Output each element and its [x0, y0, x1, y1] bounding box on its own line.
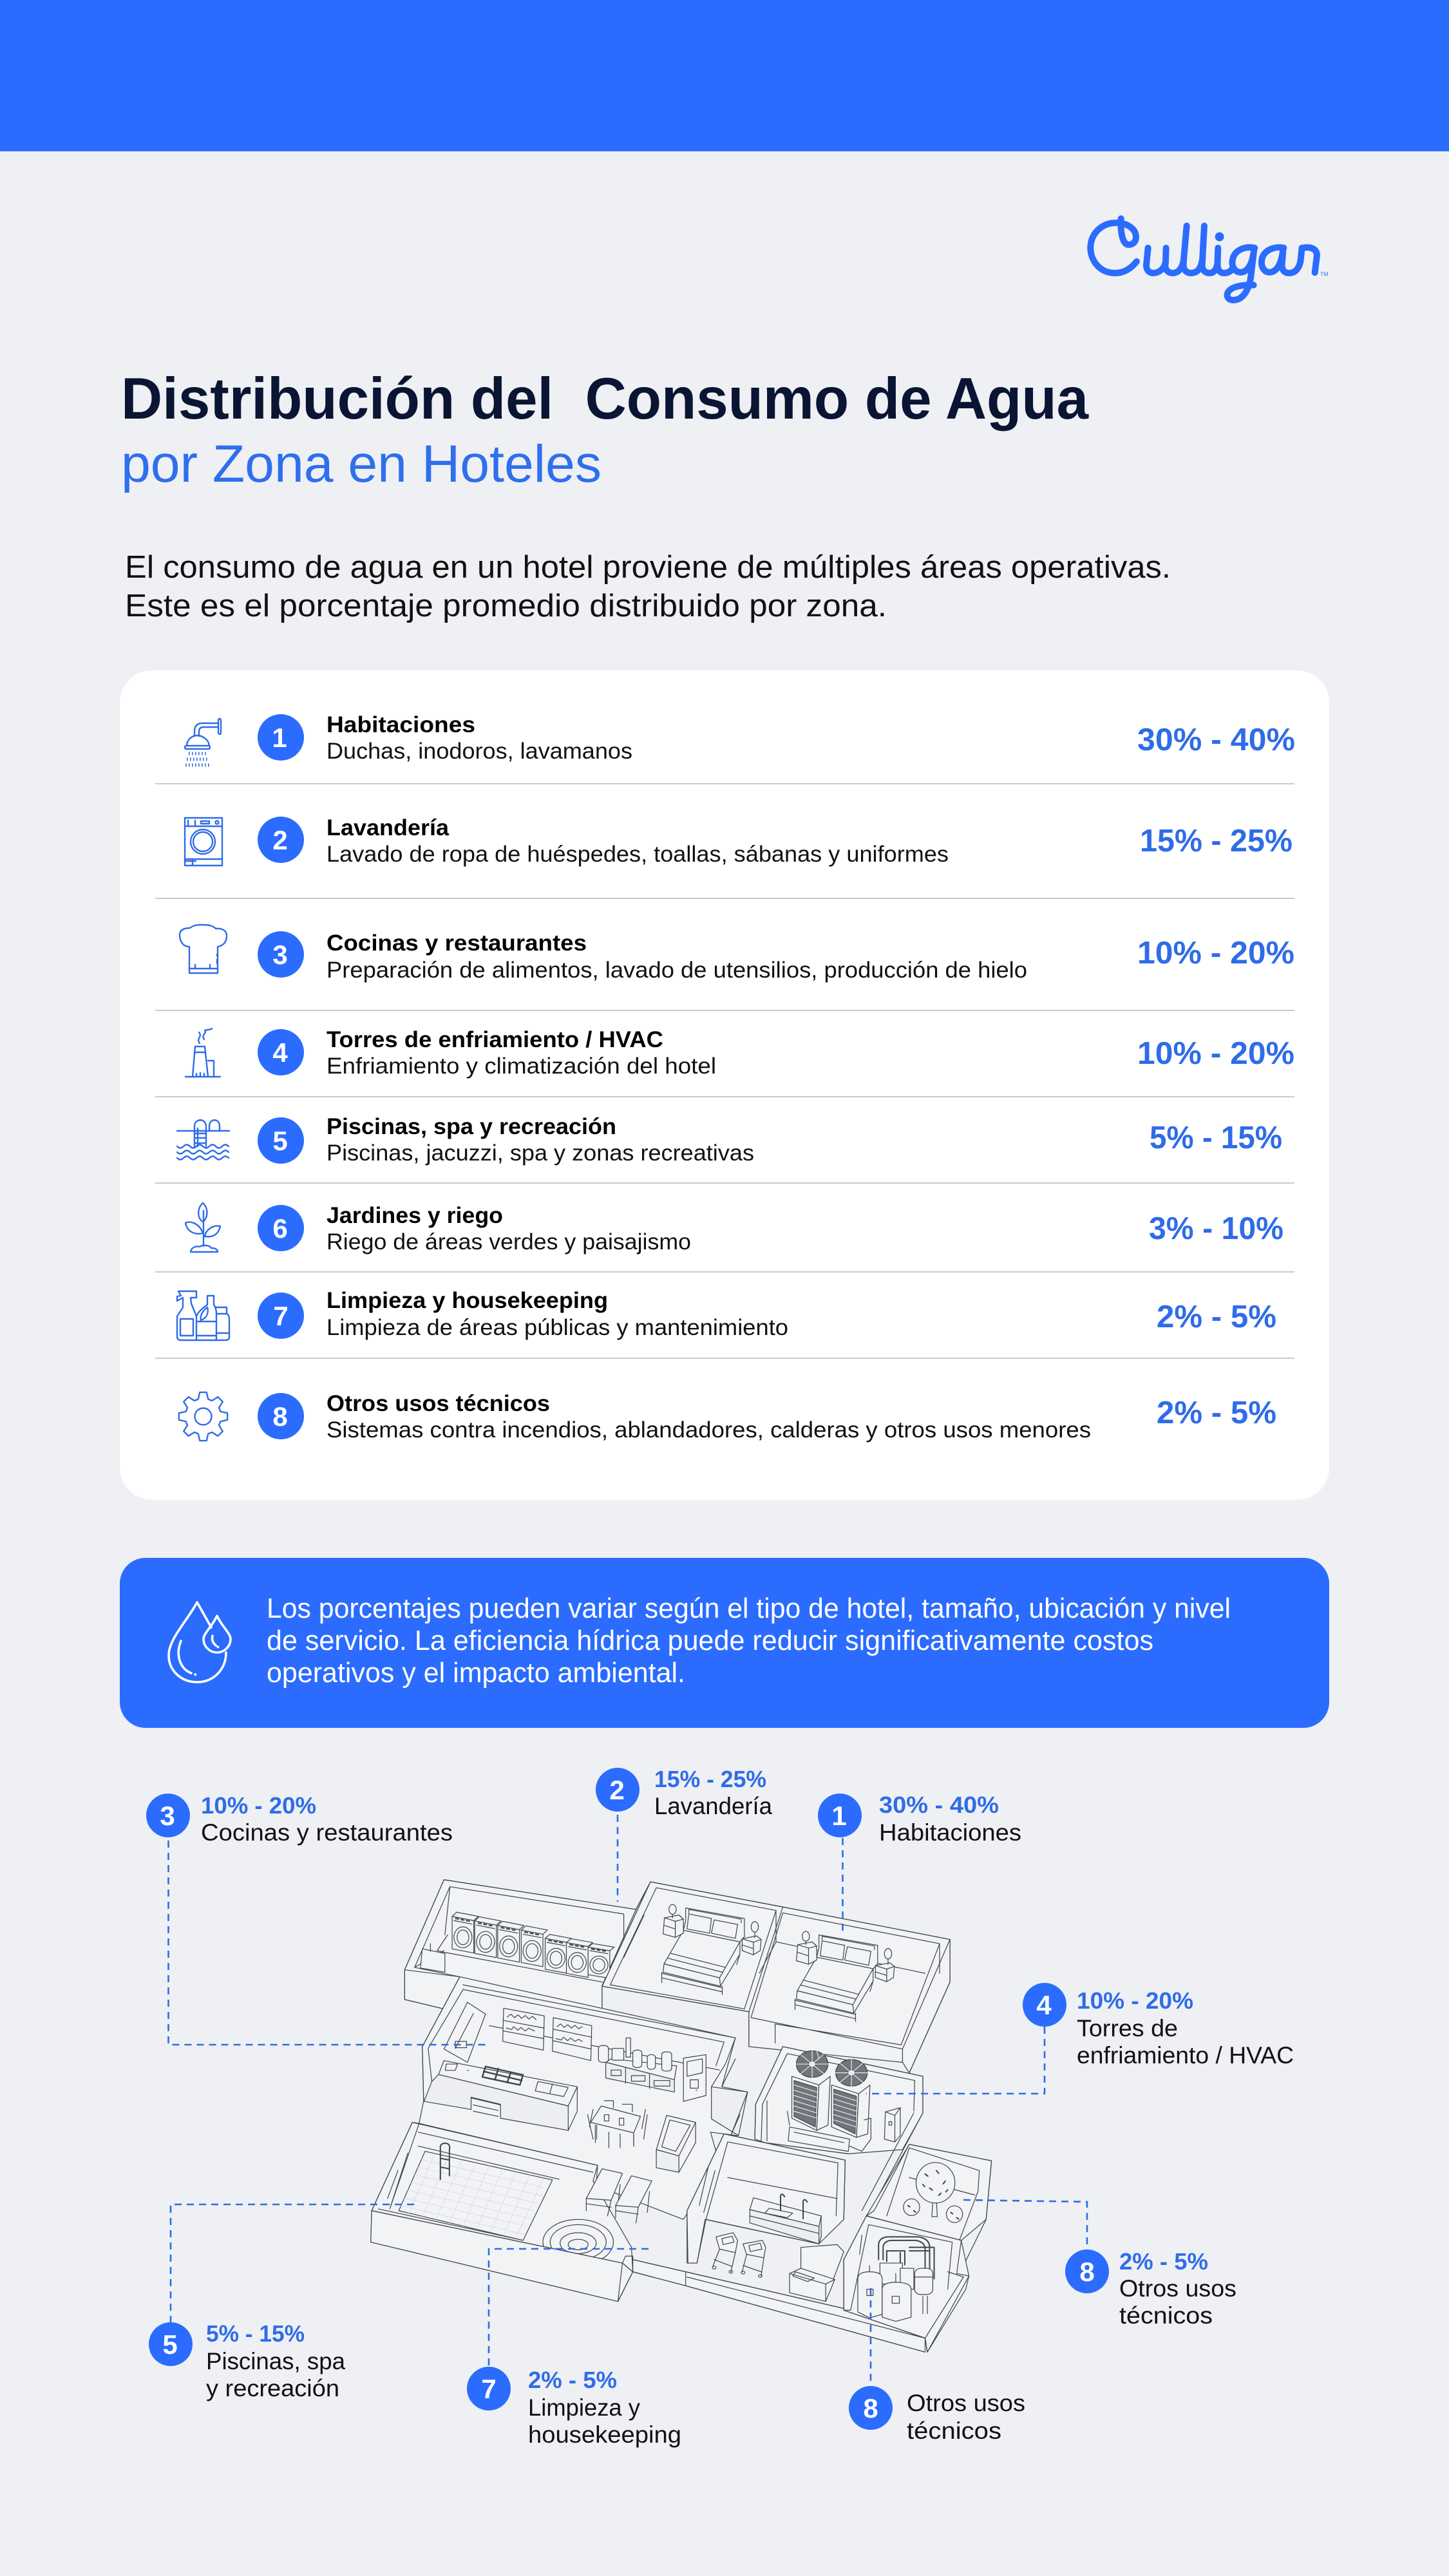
cooling tower 2: [831, 2060, 870, 2137]
row 2: Lavandería: [185, 815, 1293, 867]
row 1 text: [327, 712, 632, 764]
badge 1: 1: [272, 723, 287, 753]
service carts: [712, 2233, 766, 2277]
callout: 7 limpieza: Limpieza y: [528, 2394, 640, 2421]
row 5 text: Piscinas, spa y recreación: [327, 1114, 616, 1139]
row 8: Otros usos: [179, 1391, 1276, 1443]
cooling tower 1: [792, 2050, 830, 2130]
callout text: Los porcentajes pueden variar según el tipo de hotel, tamaño, ubicación y nivel: [267, 1593, 1231, 1624]
icon: gear: [179, 1392, 227, 1441]
row 3: Cocinas: [180, 925, 1294, 983]
row 4 text: Enfriamiento y climatización del hotel: [327, 1054, 716, 1079]
pool and spa: [371, 2123, 652, 2302]
callout: 8 otros usos (right): 8: [1079, 2257, 1095, 2287]
row 2 text: Lavado de ropa de huéspedes, toallas, sábanas y uniformes: [327, 842, 949, 867]
bathtub: [656, 2116, 696, 2172]
badge 6: 6: [272, 1213, 288, 1244]
row 8 text: Otros usos técnicos: [327, 1391, 550, 1416]
badge 3: 3: [272, 940, 288, 970]
row 7 text: Limpieza y housekeeping: [327, 1288, 608, 1313]
icon: plant: [185, 1203, 220, 1252]
callout: 8 otros usos (right): Otros usos: [1119, 2275, 1236, 2302]
icon: water drops: [169, 1602, 231, 1682]
callout: 3 cocinas: 10% - 20%: [201, 1792, 316, 1819]
row 6 text: [327, 1203, 691, 1255]
row 7 percent: 2% - 5%: [1157, 1300, 1276, 1334]
callout: 2 lavanderia: [596, 1766, 772, 1819]
laundry room: [404, 1880, 650, 2010]
callout: 8 otros usos (right): 2% - 5%: [1119, 2248, 1208, 2275]
callout: 5 piscinas: 5% - 15%: [206, 2320, 305, 2347]
icon: shower: [185, 719, 221, 765]
callout: 4 torres: 10% - 20%: [1077, 1987, 1193, 2014]
badge 4: [258, 1029, 304, 1075]
header band: [0, 0, 1449, 151]
row 7 text: Limpieza de áreas públicas y mantenimiento: [327, 1315, 788, 1340]
callout: 1 habitaciones: 30% - 40%: [879, 1792, 999, 1818]
badge 1: [258, 714, 304, 761]
title: Distribución del Consumo de Agua: [121, 366, 1089, 431]
shelves: [503, 2008, 592, 2061]
row 2 percent: 15% - 25%: [1140, 824, 1293, 858]
badge 8: [258, 1393, 304, 1439]
badge 4: 4: [272, 1037, 288, 1068]
callout banner: [120, 1558, 1329, 1728]
row 8 text: [327, 1391, 1091, 1443]
row 4 text: Torres de enfriamiento / HVAC: [327, 1027, 663, 1052]
icon: pool ladder: [177, 1120, 229, 1159]
icon: washing machine: [185, 818, 222, 866]
badge 7: [258, 1293, 304, 1339]
row 7: Limpieza: [177, 1288, 1276, 1340]
callout: 1 habitaciones: [818, 1792, 1021, 1846]
row 5: Piscinas: [177, 1114, 1282, 1166]
bathroom: [687, 2134, 845, 2302]
row 8 percent: 2% - 5%: [1157, 1396, 1276, 1430]
callout: 4 torres: [1023, 1983, 1294, 2069]
badge 3: [258, 931, 304, 978]
callout: 2 lavanderia: 15% - 25%: [654, 1766, 766, 1792]
callout: 4 torres: 4: [1036, 1990, 1052, 2020]
row 5 text: [327, 1114, 754, 1166]
row 1: Habitaciones: [185, 712, 1295, 765]
prep table: [598, 2038, 677, 2092]
row 4 text: [327, 1027, 716, 1079]
callout: 3 cocinas: [146, 1792, 453, 1846]
callout: 8 otros usos (bottom): [849, 2386, 1025, 2444]
callout: 2 lavanderia: 2: [609, 1775, 625, 1805]
leader lines: [169, 1815, 1087, 2384]
callout: 5 piscinas: [149, 2320, 345, 2401]
callout: 3 cocinas: 3: [160, 1801, 175, 1831]
badge 7: 7: [273, 1301, 289, 1331]
icon: cooling tower: [185, 1028, 220, 1077]
callout text: de servicio. La eficiencia hídrica puede reducir significativamente costos: [267, 1625, 1153, 1656]
water tanks: [858, 2263, 933, 2322]
dining table: [587, 2101, 647, 2148]
callout: 8 otros usos (right): técnicos: [1119, 2302, 1213, 2329]
illustration: isometric hotel floor plan: [371, 1880, 992, 2352]
garden: [866, 2145, 992, 2270]
row 7 text: [327, 1288, 788, 1340]
vanity: [750, 2194, 821, 2244]
callout: 1 habitaciones: 1: [831, 1801, 847, 1831]
callout: 8 otros usos (bottom): Otros usos: [907, 2390, 1025, 2416]
kitchen counter: [424, 2002, 577, 2130]
jacuzzi: [543, 2219, 613, 2265]
row 8 text: Sistemas contra incendios, ablandadores, calderas y otros usos menores: [327, 1417, 1091, 1443]
callout: 4 torres: enfriamiento / HVAC: [1077, 2042, 1294, 2069]
technical room: [844, 2216, 969, 2352]
callout: 1 habitaciones: Habitaciones: [879, 1819, 1021, 1846]
callout: 8 otros usos (bottom): técnicos: [907, 2418, 1001, 2444]
row 3 text: Cocinas y restaurantes: [327, 931, 587, 956]
row 5 percent: 5% - 15%: [1150, 1121, 1282, 1155]
sun loungers: [586, 2169, 652, 2223]
sink cabinet: [790, 2244, 844, 2302]
intro text: El consumo de agua en un hotel proviene de múltiples áreas operativas.: [125, 550, 1171, 585]
callout: 7 limpieza: [467, 2367, 681, 2448]
row 4 percent: 10% - 20%: [1137, 1036, 1294, 1071]
callout: 8 otros usos (bottom): 8: [863, 2393, 878, 2423]
logo: Culligan: TM: [1320, 270, 1328, 277]
HVAC room: [755, 2047, 923, 2214]
intro text: [125, 550, 1171, 623]
badge 5: [258, 1117, 304, 1164]
callout: 5 piscinas: 5: [162, 2329, 178, 2360]
badge 2: 2: [272, 825, 288, 855]
callout: 3 cocinas: Cocinas y restaurantes: [201, 1819, 453, 1846]
fridge: [683, 2054, 706, 2101]
callout: 7 limpieza: 2% - 5%: [528, 2367, 617, 2393]
badge 6: [258, 1205, 304, 1251]
intro text: Este es el porcentaje promedio distribuido por zona.: [125, 589, 887, 623]
callout: 8 otros usos (right): [1065, 2248, 1236, 2329]
row 4: Torres: [185, 1027, 1294, 1079]
callout: 4 torres: Torres de: [1077, 2015, 1178, 2041]
callout: 5 piscinas: Piscinas, spa: [206, 2348, 345, 2374]
row 1 text: Duchas, inodoros, lavamanos: [327, 739, 632, 764]
title: por Zona en Hoteles: [121, 435, 601, 493]
row 2 text: Lavandería: [327, 815, 450, 840]
title: [121, 366, 1089, 493]
guest rooms: [602, 1882, 950, 2073]
row 6 percent: 3% - 10%: [1149, 1211, 1283, 1246]
icon: chef hat: [180, 925, 227, 973]
callout: 5 piscinas: y recreación: [206, 2375, 339, 2401]
logo: Culligan: [1090, 218, 1328, 300]
kitchen: [419, 1977, 748, 2219]
badge 2: [258, 817, 304, 863]
row 6 text: Jardines y riego: [327, 1203, 503, 1228]
tree: [904, 2163, 963, 2222]
row 5 text: Piscinas, jacuzzi, spa y zonas recreativas: [327, 1141, 754, 1166]
row 6: Jardines: [185, 1203, 1283, 1255]
callout: 2 lavanderia: Lavandería: [654, 1793, 772, 1819]
row 1 text: Habitaciones: [327, 712, 475, 737]
pipes: [878, 2237, 934, 2278]
badge 5: 5: [272, 1126, 288, 1156]
callout: 7 limpieza: housekeeping: [528, 2421, 681, 2448]
callout: 7 limpieza: 7: [481, 2374, 497, 2404]
callout text: operativos y el impacto ambiental.: [267, 1657, 685, 1689]
panel: zone table: [120, 670, 1329, 1500]
row 3 percent: 10% - 20%: [1137, 936, 1294, 971]
callout text: [267, 1593, 1231, 1689]
row 1 percent: 30% - 40%: [1137, 723, 1295, 757]
badge 8: 8: [272, 1401, 288, 1432]
row 3 text: Preparación de alimentos, lavado de utensilios, producción de hielo: [327, 958, 1027, 983]
icon: cleaning bottles: [177, 1291, 229, 1340]
front terrace strip: [633, 2260, 925, 2352]
row 2 text: [327, 815, 949, 867]
row 3 text: [327, 931, 1027, 983]
row 6 text: Riego de áreas verdes y paisajismo: [327, 1229, 691, 1255]
